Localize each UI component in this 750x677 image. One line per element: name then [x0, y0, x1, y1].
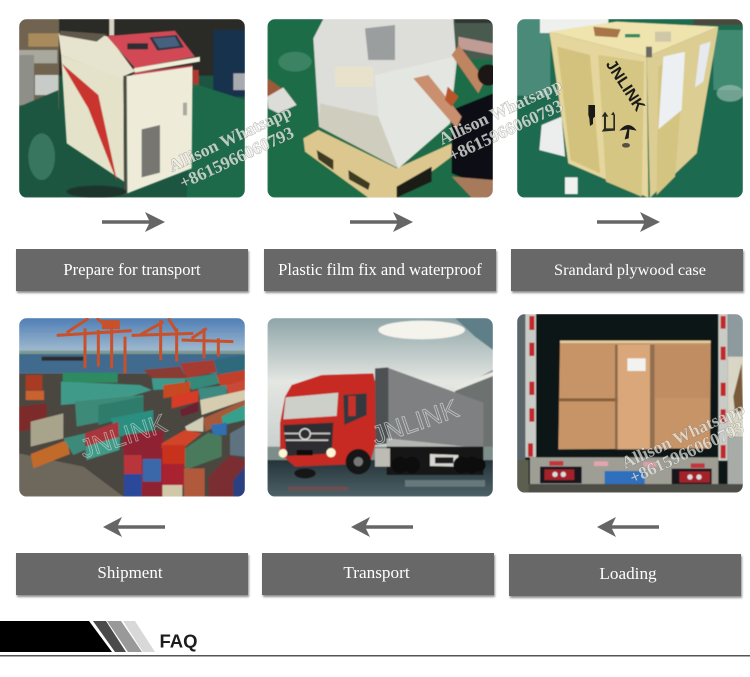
port cranes: [57, 318, 233, 373]
photo: truck transport: [267, 318, 493, 497]
label: Shipment: Shipment: [97, 563, 163, 582]
photo: plywood case: [517, 19, 743, 198]
label: Loading: Loading: [599, 564, 657, 583]
machine body: [58, 31, 200, 198]
photo: machine prepared for transport: [19, 19, 245, 198]
label: Shipment: [16, 553, 248, 595]
arrow: left 1: [103, 517, 165, 537]
photo: plastic film wrapping: [267, 19, 499, 198]
FAQ heading: FAQ: [160, 630, 198, 652]
label: Loading: [509, 554, 741, 596]
label: Srandard plywood case: Srandard plywood case: [554, 260, 706, 279]
watermark: Allison Whatsapp 3: +8615966060793: [626, 417, 747, 488]
watermark: Allison Whatsapp 2: +8615966060793: [445, 95, 566, 166]
JNLINK watermark: JNLINK: [76, 408, 171, 464]
crate markings: JNLINK: [602, 57, 648, 115]
arrow: right 3: [597, 212, 660, 232]
photo: crate loaded on truck: [517, 314, 743, 493]
label: Plastic film fix and waterproof: [264, 249, 496, 291]
label: Prepare for transport: Prepare for transport: [63, 260, 201, 279]
label: Transport: [262, 553, 494, 595]
arrow: left 3: [597, 517, 659, 537]
arrow: right 2: [350, 212, 413, 232]
JNLINK watermark: JNLINK: [368, 393, 463, 451]
label: Transport: Transport: [343, 563, 410, 582]
watermark: Allison Whatsapp 2: Allison Whatsapp: [435, 74, 565, 149]
arrow: left 2: [351, 517, 413, 537]
label: Plastic film fix and waterproof: Plastic film fix and waterproof: [278, 260, 482, 279]
crate markings: [588, 57, 648, 148]
watermark: Allison Whatsapp 3: Allison Whatsapp: [618, 398, 748, 473]
FAQ section banner: [0, 621, 750, 656]
photo: container port shipment: [19, 318, 245, 497]
label: Prepare for transport: [16, 249, 248, 291]
watermark: Allison Whatsapp 1: +8615966060793: [176, 122, 297, 193]
watermark: Allison Whatsapp 1: Allison Whatsapp: [165, 101, 295, 176]
arrow: right 1: [102, 212, 165, 232]
label: Srandard plywood case: [511, 249, 743, 291]
